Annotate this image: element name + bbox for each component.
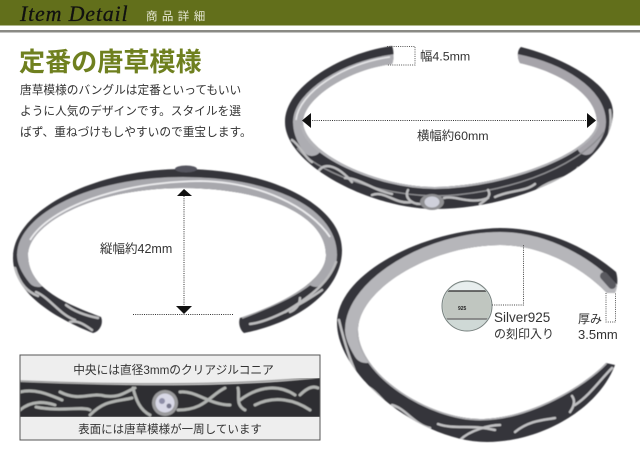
close-up engraved band bbox=[20, 377, 320, 417]
header title: Item Detail: Item Detail bbox=[19, 1, 128, 26]
description text bbox=[20, 83, 252, 139]
width guide: 4.5mm: 幅4.5mm bbox=[420, 48, 470, 64]
callout: close-up panel bbox=[20, 355, 320, 440]
clear zirconia stone bbox=[420, 194, 444, 210]
thickness guide: 3.5mm: 厚み bbox=[578, 312, 602, 326]
magnified Silver925 stamp: 925 bbox=[458, 306, 467, 312]
bangle: lower right view bbox=[330, 222, 625, 447]
height arrow: 42mm bbox=[100, 189, 233, 314]
bangle: left view bbox=[5, 160, 350, 340]
leader line: stamp bbox=[492, 245, 524, 305]
header banner bbox=[0, 0, 640, 32]
label: Silver925 stamp bbox=[494, 310, 554, 341]
close-up zirconia stone bbox=[152, 390, 178, 416]
description text: ように人気のデザインです。スタイルを選 bbox=[20, 104, 241, 118]
width arrow: 60mm: 横幅約60mm bbox=[417, 128, 489, 143]
callout text: centre stone: 中央には直径3mmのクリアジルコニア bbox=[73, 363, 274, 377]
description text: 唐草模様のバングルは定番といってもいい bbox=[20, 83, 241, 97]
header subtitle: 商品詳細 bbox=[146, 9, 210, 23]
thickness guide: 3.5mm: 3.5mm bbox=[578, 327, 618, 342]
description text: ばず、重ねづけもしやすいので重宝します。 bbox=[20, 125, 252, 139]
heading: 定番の唐草模様 bbox=[19, 47, 202, 77]
callout text: surface pattern: 表面には唐草模様が一周しています bbox=[78, 422, 262, 436]
bangle: top right view bbox=[280, 40, 620, 215]
magnified Silver925 stamp bbox=[440, 280, 494, 331]
thickness guide: 3.5mm bbox=[578, 293, 618, 342]
label: Silver925 stamp: の刻印入り bbox=[494, 327, 554, 341]
label: Silver925 stamp: Silver925 bbox=[494, 310, 550, 325]
width arrow: 60mm bbox=[302, 113, 596, 143]
width guide: 4.5mm bbox=[387, 46, 470, 65]
height arrow: 42mm: 縦幅約42mm bbox=[100, 241, 172, 256]
